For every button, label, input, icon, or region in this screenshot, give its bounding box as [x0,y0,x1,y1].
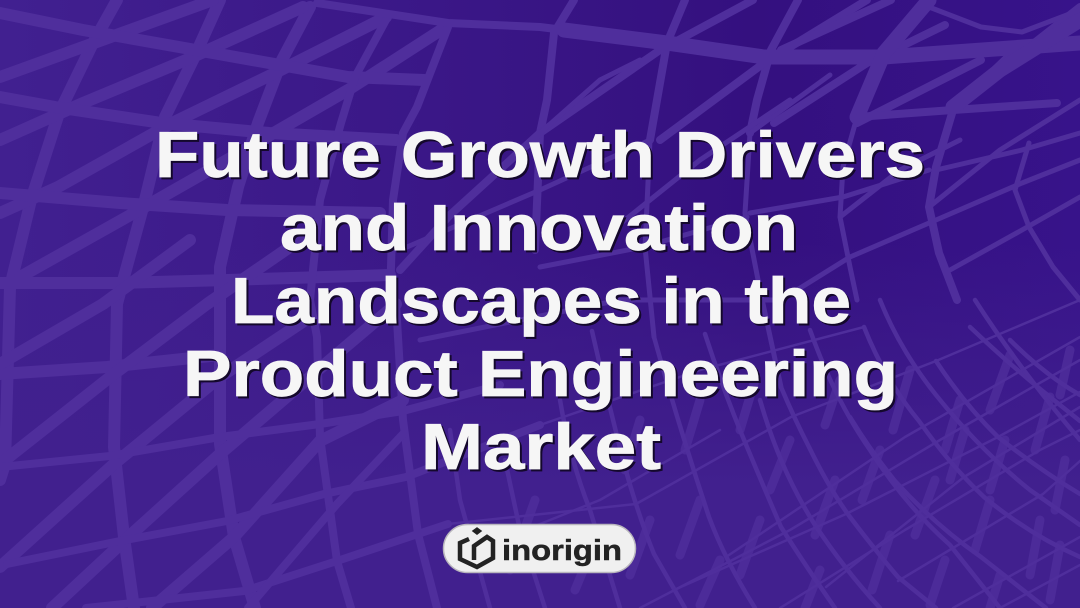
logo wordmark: inorigin [502,535,622,567]
title: Future Growth Drivers [155,118,925,191]
title [155,118,925,483]
title: Landscapes in the [231,264,851,337]
logo badge [444,524,636,572]
icon: inorigin cube mark [460,528,493,567]
title: and Innovation [280,191,798,264]
title: Product Engineering [183,337,898,410]
title: Market [421,410,661,483]
